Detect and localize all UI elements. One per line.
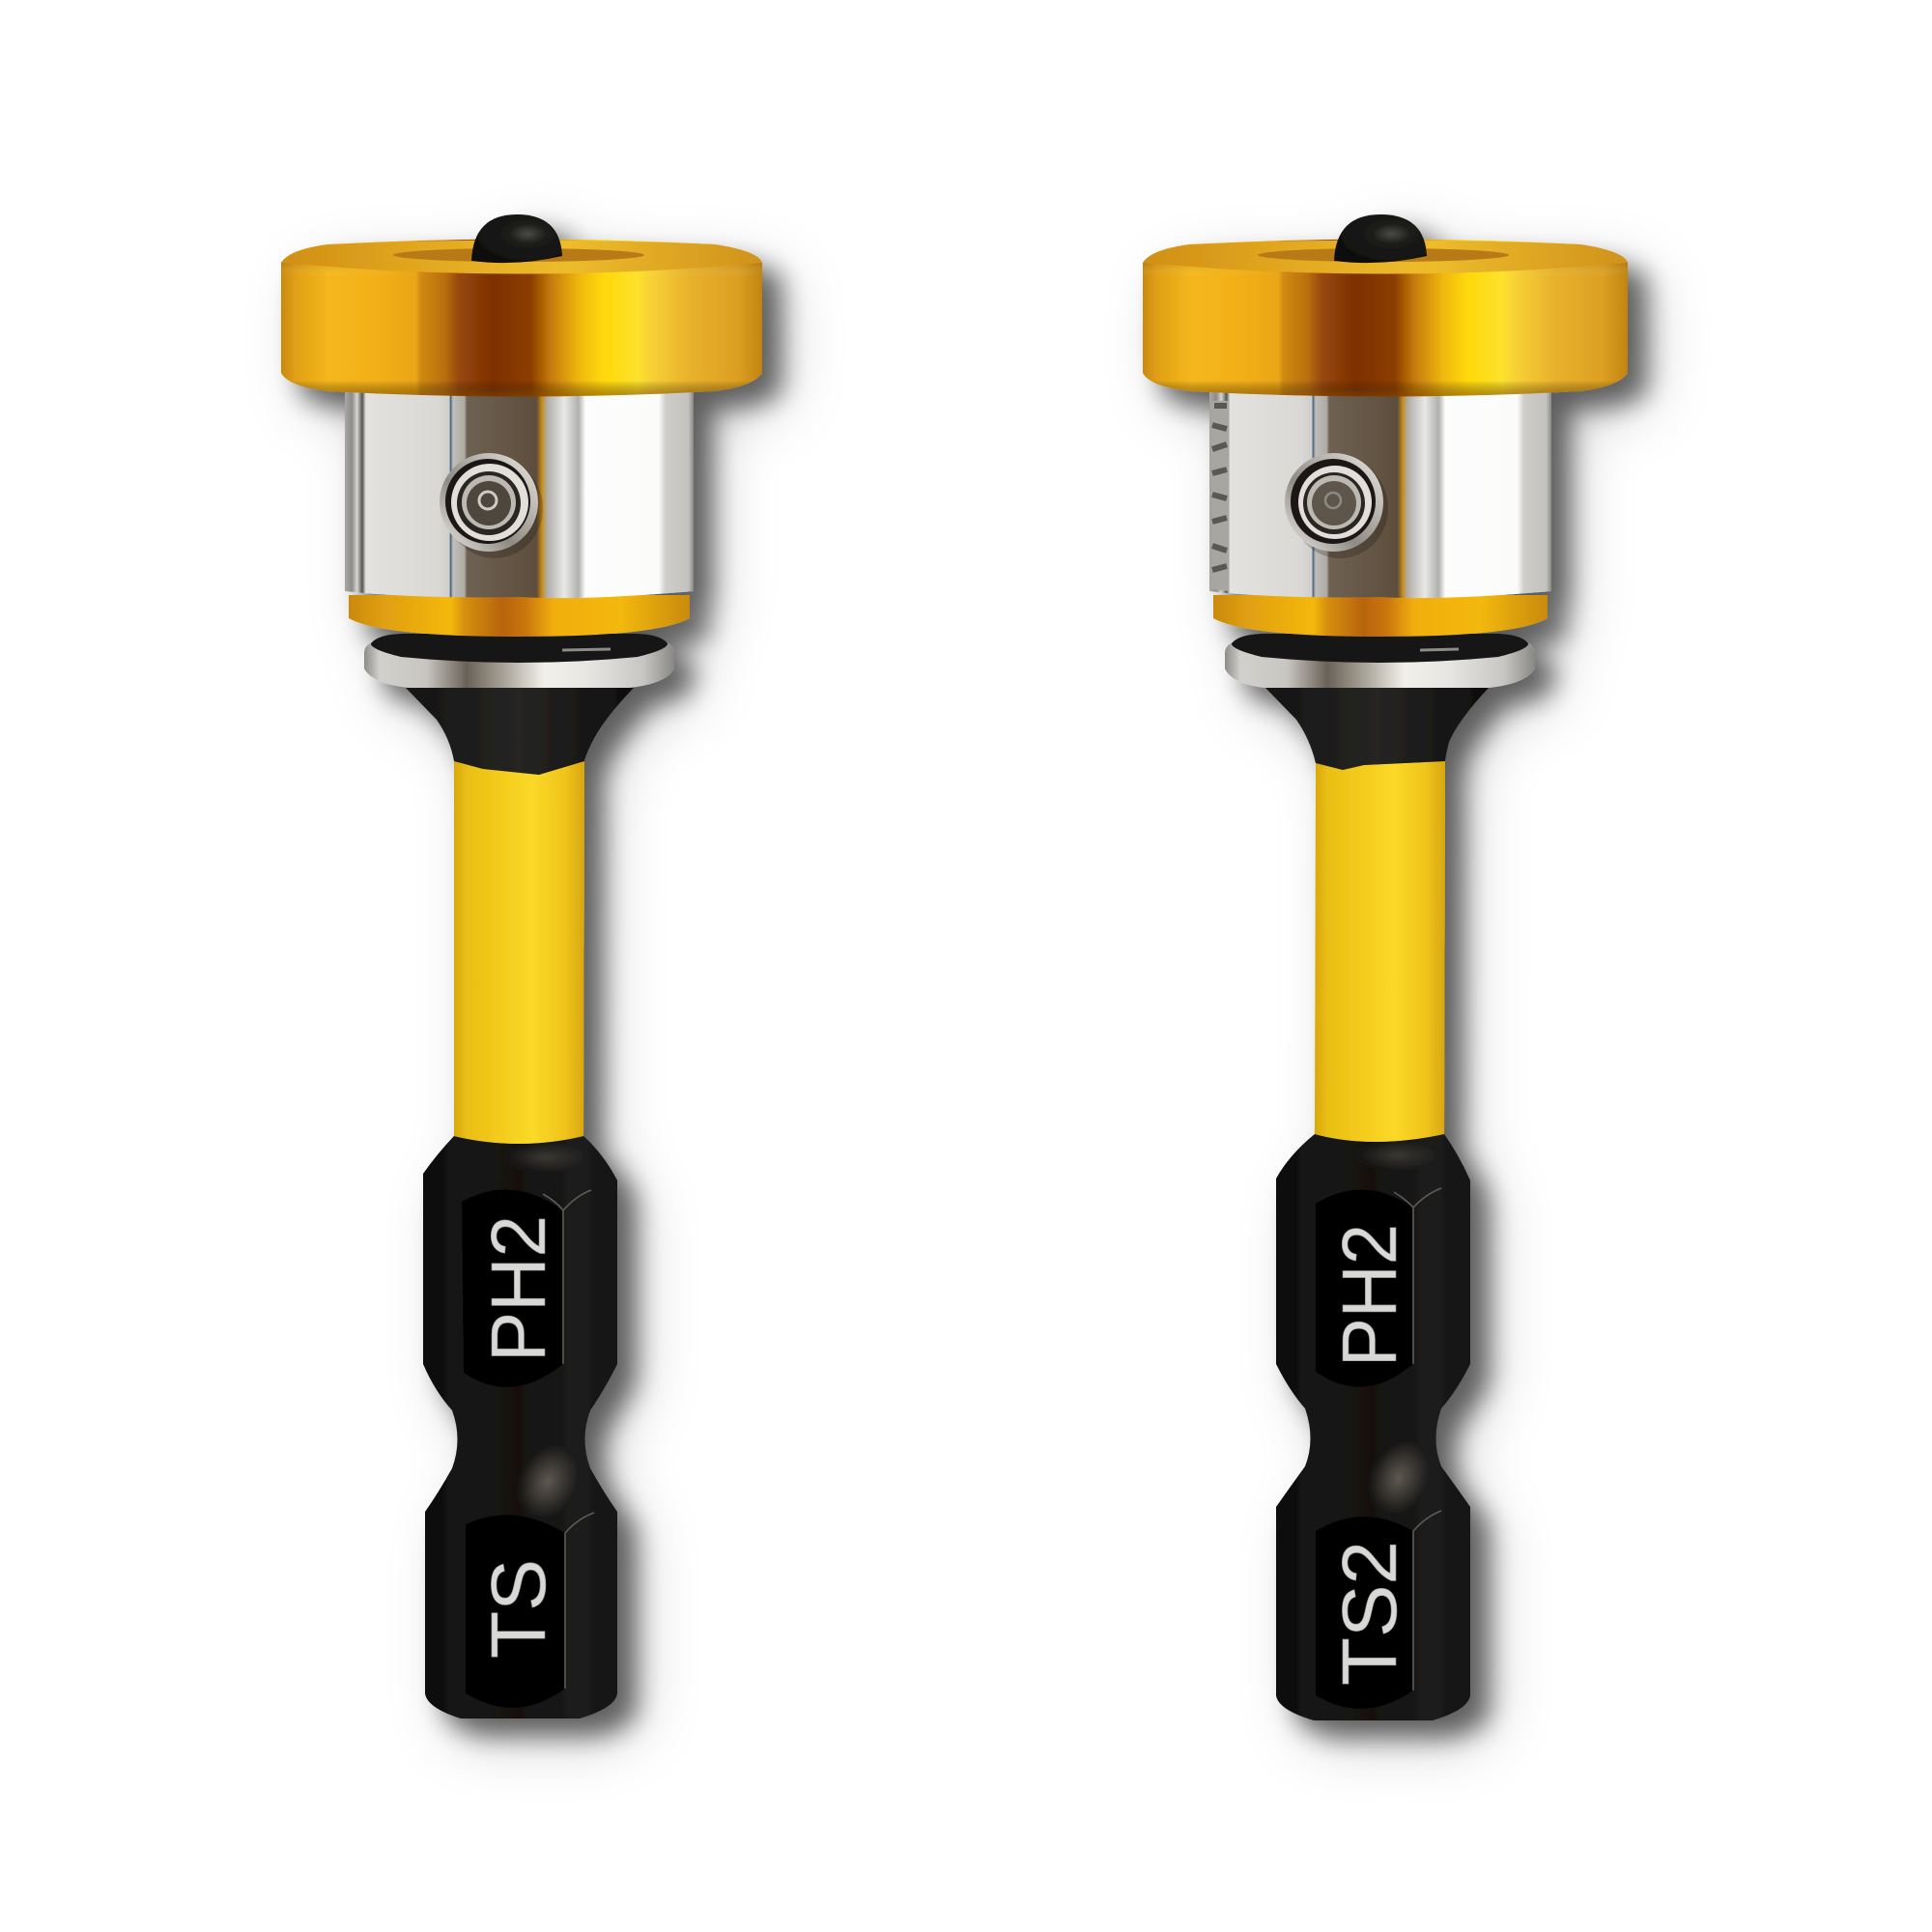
label: TS: TS <box>475 1559 561 1659</box>
waist gloss <box>505 1435 590 1529</box>
label: PH2: PH2 <box>475 1215 561 1362</box>
screw <box>1285 453 1388 558</box>
black hex body <box>1276 1134 1470 1720</box>
silver collar <box>1209 391 1551 598</box>
label: TS2: TS2 <box>1326 1541 1412 1686</box>
gold head <box>1143 240 1628 396</box>
hex corner highlights <box>543 1190 594 1689</box>
washer <box>364 640 674 688</box>
knurled edge <box>1211 401 1229 591</box>
gold head top face <box>1143 240 1628 274</box>
black ball <box>471 214 562 263</box>
front hex faces <box>462 1189 563 1387</box>
O-ring glint <box>562 649 611 650</box>
O-ring <box>1232 634 1528 663</box>
yellow shaft <box>1315 761 1445 1142</box>
hex corner highlights <box>1394 1188 1441 1690</box>
washer <box>1225 640 1535 688</box>
screw <box>440 453 543 558</box>
yellow shaft <box>454 759 584 1144</box>
silver collar <box>345 391 694 598</box>
bore opening <box>393 248 644 262</box>
black flare <box>1265 688 1489 770</box>
bit: PH2 / TS2 <box>1143 214 1628 1720</box>
gold lower band <box>349 595 690 637</box>
gold head top face <box>281 240 762 274</box>
waist gloss <box>1356 1431 1441 1525</box>
bit: PH2 / TS <box>281 214 762 1719</box>
O-ring <box>371 634 668 663</box>
front hex faces <box>1316 1189 1413 1387</box>
gold head <box>281 240 762 396</box>
black flare <box>406 688 634 775</box>
label: PH2: PH2 <box>1326 1224 1412 1367</box>
gold lower band <box>1213 595 1548 637</box>
black hex body <box>423 1136 617 1719</box>
bore opening <box>1258 248 1509 262</box>
O-ring glint <box>1420 649 1459 650</box>
black ball <box>1334 214 1427 263</box>
